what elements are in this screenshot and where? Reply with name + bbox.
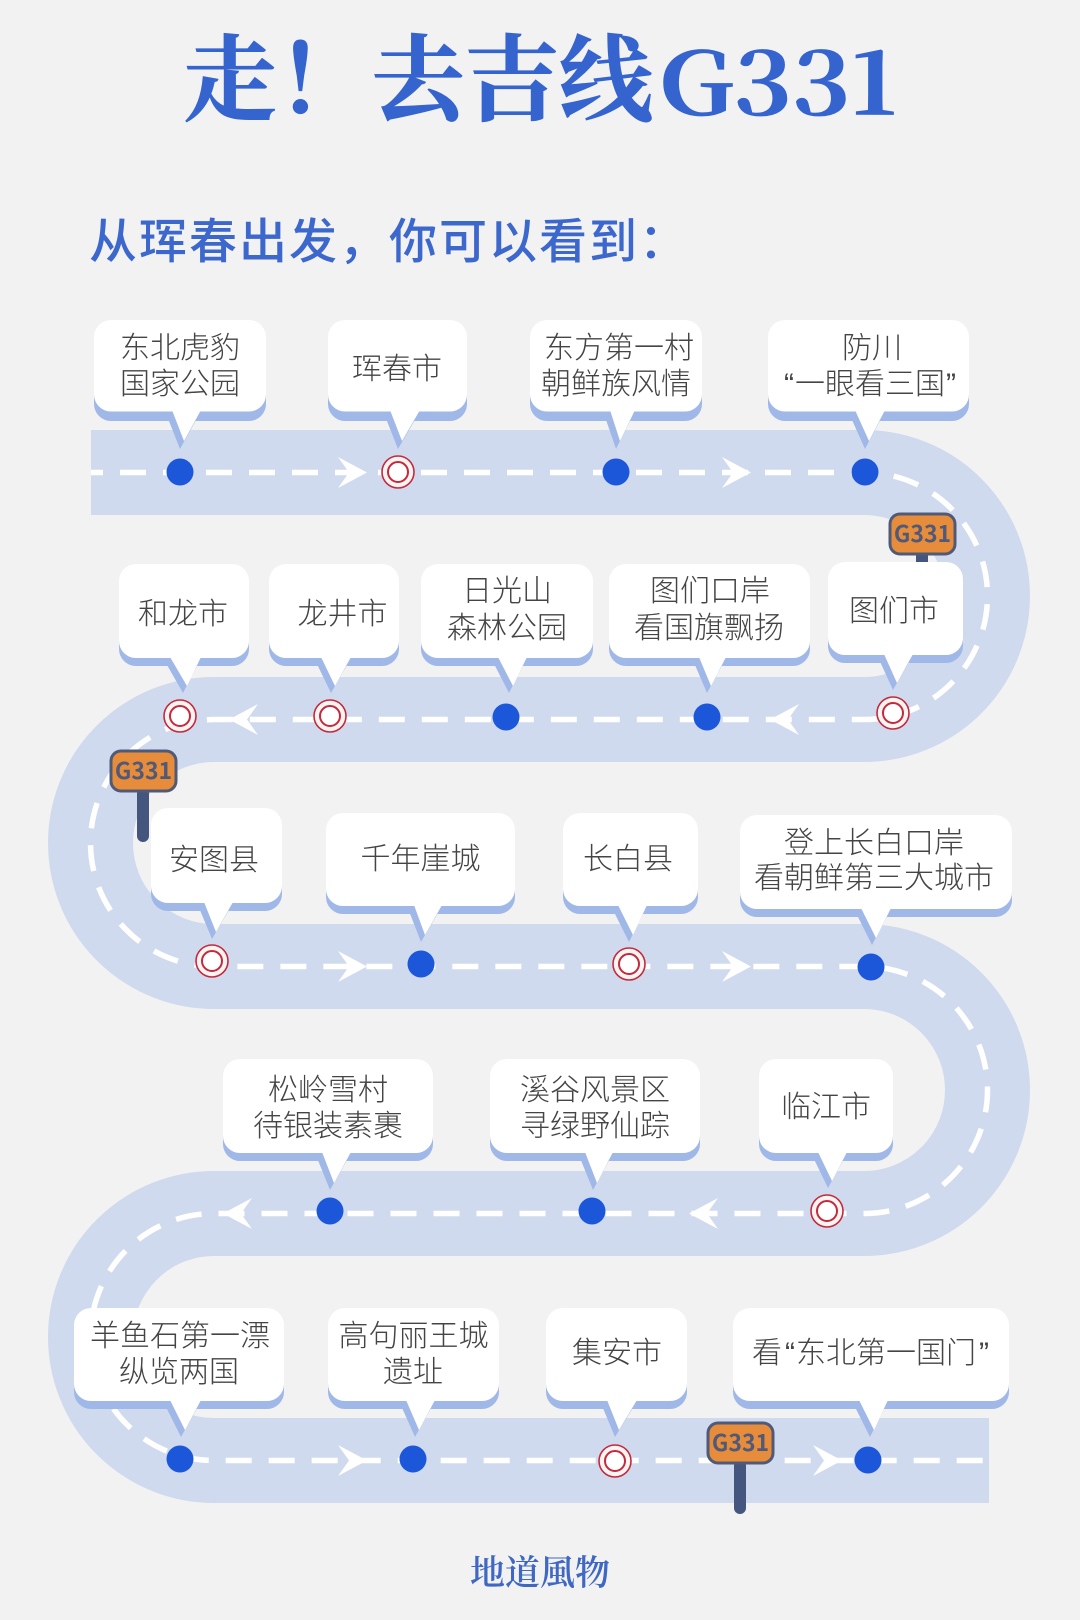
callout: 日光山森林公园: 森林公园 (447, 612, 567, 645)
callout: 临江市: 临江市 (781, 1091, 871, 1124)
callout: 图们市 (828, 562, 963, 690)
callout: 防川“一眼看三国” (768, 320, 969, 449)
callout: 东北虎豹国家公园: 东北虎豹 (120, 332, 240, 365)
callout: 防川“一眼看三国”: “一眼看三国” (784, 368, 956, 401)
road sign: G331 bottom (708, 1423, 773, 1514)
callout: 长白县 (563, 813, 698, 942)
callout: 图们口岸看国旗飘扬: 看国旗飘扬 (634, 612, 784, 645)
callout: 集安市: 集安市 (572, 1337, 662, 1370)
callout: 东北虎豹国家公园 (94, 320, 266, 449)
callout: 东方第一村朝鲜族风情: 东方第一村 (544, 332, 694, 365)
callout: 东方第一村朝鲜族风情: 朝鲜族风情 (541, 368, 691, 401)
route stop markers (164, 456, 909, 1477)
callout: 龙井市 (269, 564, 399, 693)
callout: 珲春市: 珲春市 (352, 353, 442, 386)
winding road (91, 472, 989, 1460)
callout: 羊鱼石第一漂纵览两国: 纵览两国 (119, 1356, 239, 1389)
callout: 千年崖城: 千年崖城 (360, 843, 480, 876)
callout: 高句丽王城遗址: 高句丽王城 (338, 1320, 488, 1353)
callout: 长白县: 长白县 (583, 843, 673, 876)
callout: 安图县: 安图县 (169, 844, 259, 877)
road centre dashes (91, 472, 992, 1460)
direction arrows (223, 457, 842, 1476)
callout: 和龙市: 和龙市 (138, 598, 228, 631)
callout: 登上长白口岸看朝鲜第三大城市: 看朝鲜第三大城市 (754, 862, 994, 895)
footer brand: 地道風物 (470, 1546, 610, 1596)
callout: 东方第一村朝鲜族风情 (530, 320, 702, 449)
callout: 松岭雪村待银装素裹: 松岭雪村 (268, 1074, 388, 1107)
callout: 东北虎豹国家公园: 国家公园 (120, 368, 240, 401)
callout: 集安市 (546, 1308, 687, 1437)
callout: 高句丽王城遗址 (328, 1308, 499, 1437)
callout: 溪谷风景区寻绿野仙踪 (490, 1059, 700, 1190)
callout: 羊鱼石第一漂纵览两国: 羊鱼石第一漂 (90, 1320, 270, 1353)
callout: 高句丽王城遗址: 遗址 (383, 1356, 443, 1389)
callout: 日光山森林公园: 日光山 (462, 575, 552, 608)
callout: 看“东北第一国门” (733, 1308, 1009, 1437)
callout: 登上长白口岸看朝鲜第三大城市 (740, 815, 1012, 945)
callout: 溪谷风景区寻绿野仙踪: 寻绿野仙踪 (520, 1110, 670, 1143)
callout: 松岭雪村待银装素裹 (223, 1059, 433, 1190)
title: 走！去吉线 (183, 5, 653, 140)
subtitle: 从珲春出发，你可以看到： (89, 216, 689, 269)
callout: 图们口岸看国旗飘扬: 图们口岸 (650, 575, 770, 608)
road sign: G331 left (111, 751, 176, 842)
title: G331 (659, 17, 897, 140)
callout: 图们市: 图们市 (849, 595, 939, 628)
callout: 溪谷风景区寻绿野仙踪: 溪谷风景区 (520, 1074, 670, 1107)
callout: 和龙市 (119, 564, 249, 693)
callout: 日光山森林公园 (421, 564, 593, 693)
road sign: G331 upper right (890, 514, 955, 570)
road sign: G331 left: G331 (115, 752, 172, 786)
callout: 登上长白口岸看朝鲜第三大城市: 登上长白口岸 (784, 827, 964, 860)
road sign: G331 bottom: G331 (712, 1424, 769, 1458)
callout: 防川“一眼看三国”: 防川 (842, 332, 902, 365)
callout: 临江市 (759, 1059, 893, 1188)
road sign: G331 upper right: G331 (894, 515, 951, 549)
callout: 图们口岸看国旗飘扬 (609, 564, 810, 693)
callout: 看“东北第一国门”: 看“东北第一国门” (752, 1337, 989, 1370)
callout: 安图县 (151, 808, 282, 939)
callout: 龙井市: 龙井市 (298, 598, 388, 631)
callout: 珲春市 (328, 320, 467, 449)
title (183, 5, 897, 140)
callout: 羊鱼石第一漂纵览两国 (74, 1308, 284, 1437)
callout: 千年崖城 (326, 813, 515, 942)
callout: 松岭雪村待银装素裹: 待银装素裹 (253, 1110, 403, 1143)
